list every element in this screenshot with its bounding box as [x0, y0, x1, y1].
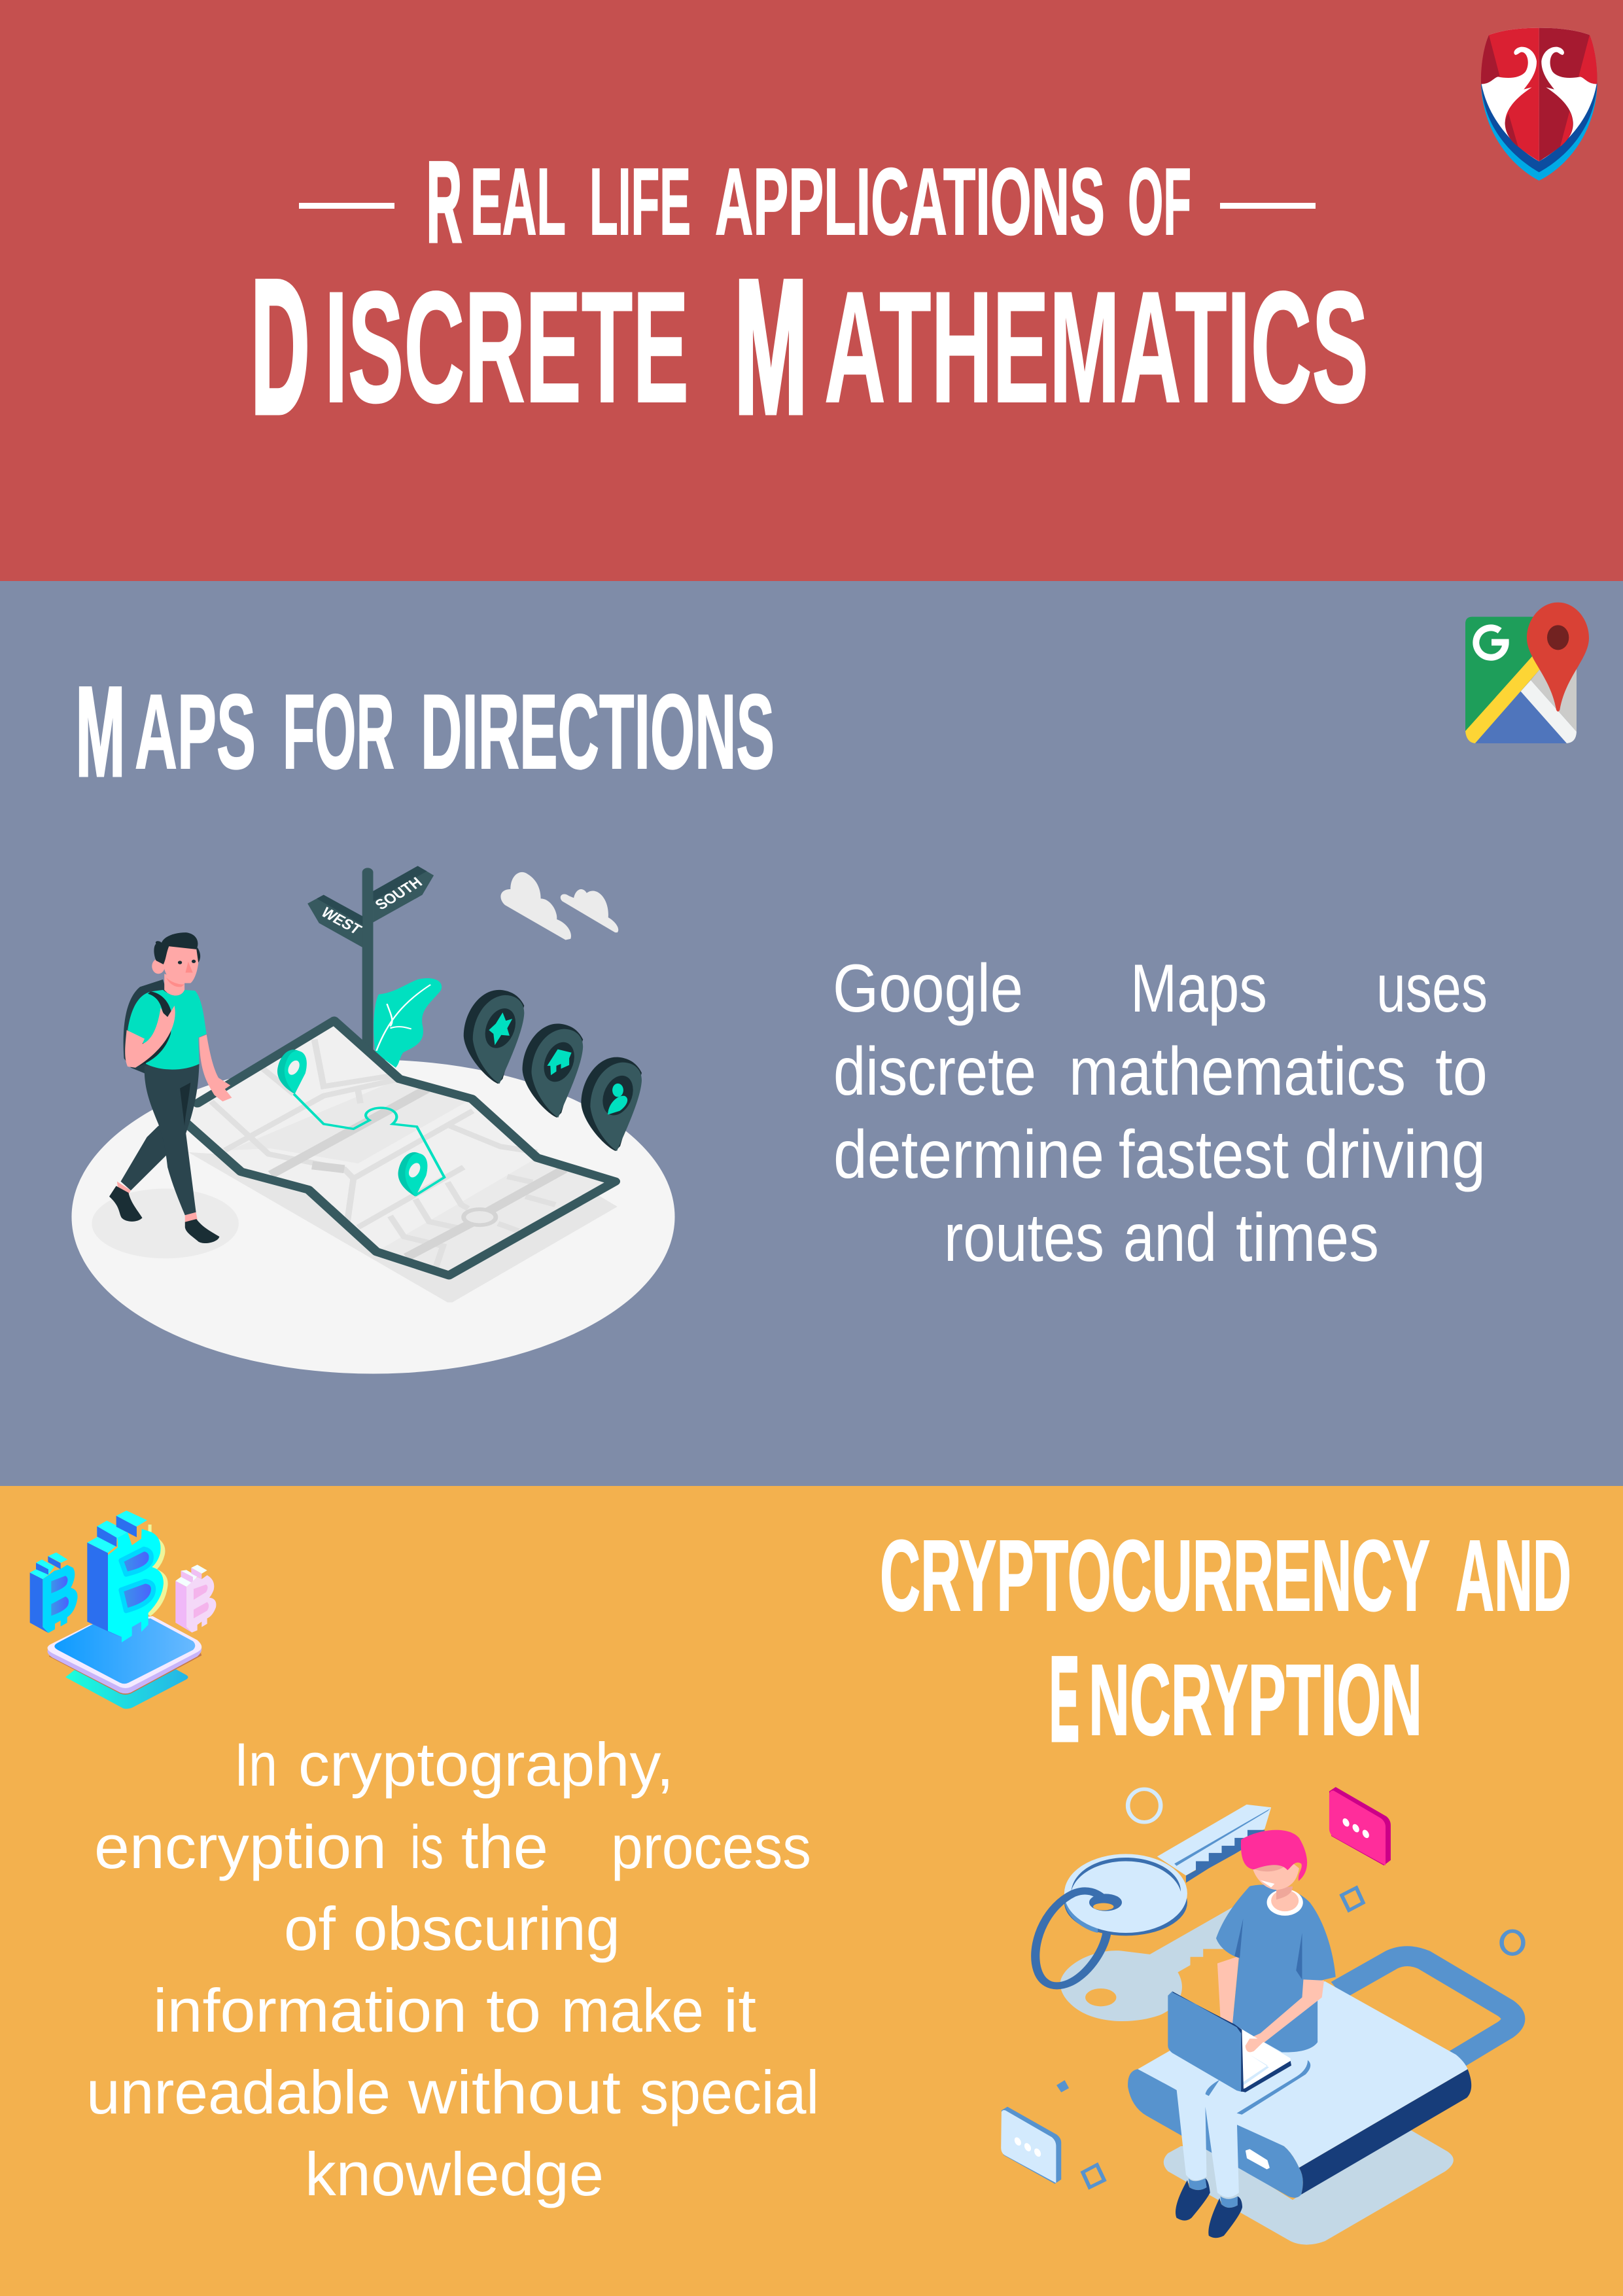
title line: Real life applications of: EAL	[470, 149, 566, 255]
title line: Discrete Mathematics: M	[735, 241, 807, 453]
padlock shackle	[1338, 1956, 1513, 2059]
person with laptop	[1168, 1830, 1336, 2238]
text block: encryption description: obscuring	[353, 1894, 620, 1963]
panel: cryptocurrency and encryption	[0, 1486, 1623, 2296]
signpost: SOUTH	[372, 874, 426, 913]
icon: google maps logo	[1465, 603, 1589, 743]
text block: encryption description: the	[461, 1812, 548, 1881]
text block: encryption description: special	[640, 2058, 819, 2127]
heading: Maps for directions: M	[76, 661, 125, 803]
leaf plant	[374, 978, 442, 1068]
text block: google maps description: uses	[1376, 951, 1488, 1027]
text block: encryption description: unreadable	[86, 2058, 391, 2127]
heading: Maps for directions: FOR	[283, 673, 394, 791]
text block: google maps description: discrete	[833, 1034, 1036, 1110]
text block: google maps description: fastest	[1119, 1117, 1289, 1193]
folded map	[186, 1021, 618, 1302]
title line: Discrete Mathematics: ISCRETE	[324, 259, 689, 436]
text block: encryption description: is	[410, 1812, 444, 1881]
text block: google maps description: driving	[1304, 1117, 1486, 1193]
person shadow	[92, 1189, 239, 1258]
heading: Maps for directions: APS	[135, 673, 256, 791]
text block: google maps description: Google	[833, 951, 1023, 1027]
text block: encryption description: In	[234, 1730, 277, 1799]
title line: Real life applications of	[299, 139, 1316, 266]
title line: Real life applications of: APPLICATIONS	[715, 149, 1105, 255]
text block: google maps description: determine	[833, 1117, 1104, 1193]
key shadow	[1060, 1902, 1241, 2021]
heading: Cryptocurrency and Encryption	[880, 1519, 1571, 1766]
text block: encryption description: cryptography,	[298, 1730, 674, 1799]
padlock body	[1128, 1981, 1471, 2198]
panel: title banner	[0, 0, 1623, 581]
panel: maps for directions	[0, 581, 1623, 1486]
pink chat bubble	[1329, 1787, 1391, 1865]
padlock shadow	[1164, 2127, 1454, 2245]
text block: encryption description: encryption	[94, 1812, 387, 1881]
illustration: person on padlock with key	[1001, 1787, 1523, 2245]
text block: encryption description: without	[408, 2058, 621, 2127]
route line and map pins	[277, 1050, 444, 1197]
clouds	[500, 872, 618, 940]
icon: bitcoin platform	[30, 1511, 216, 1709]
walking man	[109, 932, 232, 1243]
text block: encryption description: process	[611, 1812, 811, 1881]
heading: Maps for directions	[76, 661, 775, 803]
text block: google maps description: mathematics	[1069, 1034, 1406, 1110]
title line: Discrete Mathematics	[251, 241, 1369, 453]
text block: google maps description	[833, 951, 1488, 1276]
title line: Real life applications of: R	[427, 139, 462, 266]
icon: university shield logo	[1481, 28, 1597, 181]
signpost	[307, 866, 434, 1055]
illustration: man walking with a map	[71, 866, 674, 1374]
title line: Discrete Mathematics: D	[251, 241, 309, 453]
light chat bubble	[1001, 2107, 1061, 2183]
heading: Maps for directions: DIRECTIONS	[421, 673, 775, 791]
text block: encryption description: make	[561, 1976, 704, 2045]
title line: Real life applications of: OF	[1128, 149, 1191, 255]
text block: google maps description: to	[1435, 1034, 1488, 1110]
text block: encryption description: to	[486, 1976, 541, 2045]
text block: google maps description: times	[1236, 1200, 1379, 1276]
text block: encryption description: knowledge	[305, 2140, 604, 2208]
signpost: WEST	[318, 904, 365, 938]
key	[1036, 1805, 1271, 1986]
text block: google maps description: Maps	[1130, 951, 1267, 1027]
text block: google maps description: routes	[944, 1200, 1104, 1276]
platform disk	[71, 1060, 674, 1374]
text block: encryption description: it	[724, 1976, 756, 2045]
text block: google maps description: and	[1123, 1200, 1217, 1276]
small floating shapes	[1056, 1789, 1523, 2187]
text block: encryption description: of	[284, 1894, 336, 1963]
text block: encryption description	[86, 1730, 819, 2208]
location pins	[464, 990, 642, 1151]
heading: Cryptocurrency and Encryption: E	[1049, 1631, 1079, 1766]
text block: encryption description: information	[153, 1976, 467, 2045]
title line: Real life applications of: LIFE	[589, 149, 691, 255]
